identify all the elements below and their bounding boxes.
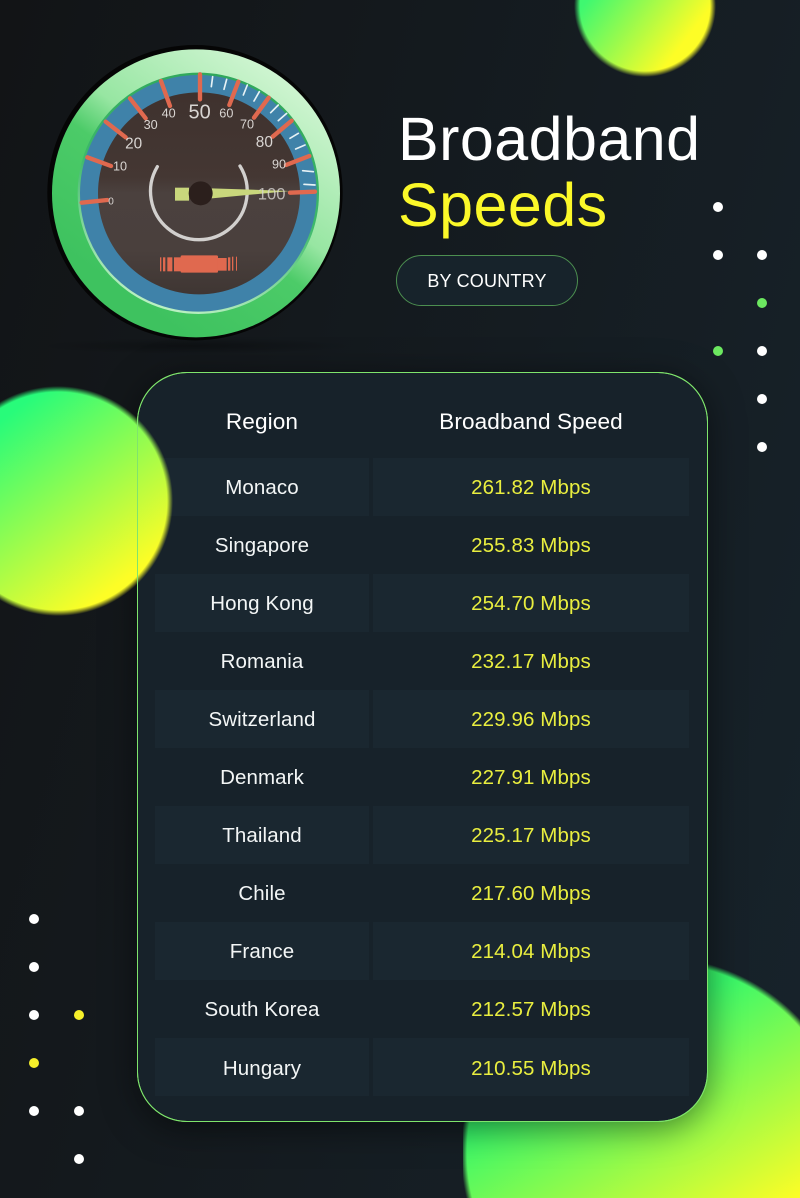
title: Broadband	[398, 105, 701, 173]
title: Speeds	[398, 171, 608, 239]
table row: Hong Kong: Hong Kong	[210, 592, 314, 615]
decorative gradient circle: top	[574, 0, 716, 77]
table row: Thailand: Thailand	[222, 824, 302, 847]
table row: France	[230, 940, 591, 963]
subtitle pill: BY COUNTRY	[427, 271, 547, 291]
speedometer gauge illustration: 10	[113, 159, 127, 173]
table row: Singapore: 255.83 Mbps	[471, 534, 591, 557]
speedometer gauge illustration: 0	[108, 196, 114, 207]
table row: Hungary: Hungary	[223, 1057, 301, 1080]
speedometer gauge illustration: 70	[240, 118, 254, 132]
table header: Region	[226, 409, 298, 434]
table row: South Korea	[204, 998, 591, 1021]
title	[398, 105, 701, 239]
speedometer gauge illustration: 60	[219, 106, 233, 120]
table row: Switzerland	[208, 708, 591, 731]
table row: Denmark: Denmark	[220, 766, 304, 789]
table row: Switzerland: 229.96 Mbps	[471, 708, 591, 731]
table row: Romania: 232.17 Mbps	[471, 650, 591, 673]
table row: Romania	[221, 650, 591, 673]
speedometer gauge illustration: 40	[162, 107, 176, 121]
table row: South Korea: South Korea	[204, 998, 320, 1021]
table row: France: 214.04 Mbps	[471, 940, 591, 963]
table row: Hungary: 210.55 Mbps	[471, 1057, 591, 1080]
panel: table card	[136, 372, 708, 1122]
speedometer gauge illustration	[48, 45, 343, 340]
table row: Chile: Chile	[238, 882, 286, 905]
speedometer gauge illustration: 50	[189, 102, 211, 124]
table row: Monaco	[225, 476, 591, 499]
table header: Broadband Speed	[439, 409, 623, 434]
speedometer gauge illustration: 30	[144, 118, 158, 132]
table row: Hong Kong: 254.70 Mbps	[471, 592, 591, 615]
table row: Chile	[238, 882, 591, 905]
decorative gradient circle: left	[0, 380, 180, 620]
table row: France: France	[230, 940, 294, 963]
table row: Singapore	[215, 534, 591, 557]
speedometer gauge illustration: 100	[258, 184, 286, 203]
dots: top right cluster	[713, 202, 767, 452]
speedometer gauge illustration: 20	[125, 135, 142, 152]
decorative gradient circle: bottom right	[463, 960, 800, 1198]
table card border overlay	[136, 372, 708, 1122]
table row: Romania: Romania	[221, 650, 303, 673]
speedometer gauge illustration: 80	[256, 134, 273, 151]
table row: Hong Kong	[210, 592, 591, 615]
table row: Hungary	[223, 1057, 591, 1080]
table row: Monaco: Monaco	[225, 476, 299, 499]
dots: bottom left cluster	[29, 914, 84, 1164]
table row: Denmark	[220, 766, 591, 789]
speedometer gauge illustration: 90	[272, 158, 286, 172]
table header	[226, 409, 623, 434]
table row: Chile: 217.60 Mbps	[471, 882, 591, 905]
table row: Switzerland: Switzerland	[208, 708, 316, 731]
subtitle pill	[396, 255, 578, 306]
table row: South Korea: 212.57 Mbps	[471, 998, 591, 1021]
table row: Thailand	[222, 824, 591, 847]
table row: Denmark: 227.91 Mbps	[471, 766, 591, 789]
table row: Singapore: Singapore	[215, 534, 309, 557]
table row: Thailand: 225.17 Mbps	[471, 824, 591, 847]
table row: Monaco: 261.82 Mbps	[471, 476, 591, 499]
